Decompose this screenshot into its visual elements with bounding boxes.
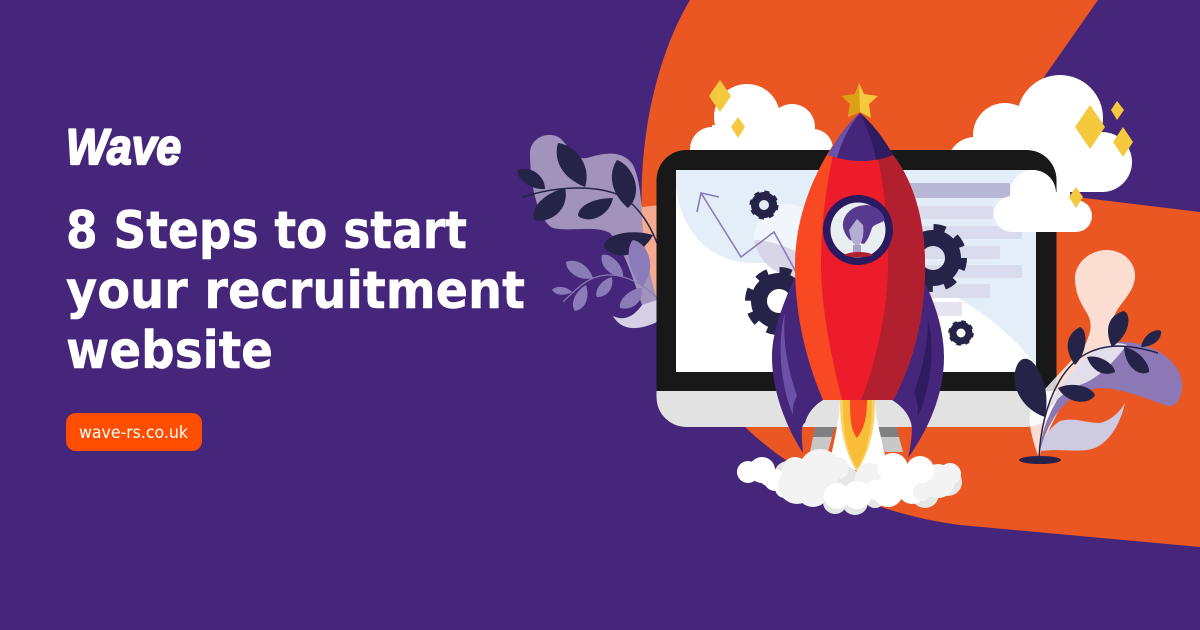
left plant behind monitor [517, 135, 660, 328]
monitor stand [810, 427, 903, 452]
rocket flames [828, 400, 888, 472]
heading [66, 201, 525, 381]
monitor [656, 150, 1056, 427]
line chart arrow [697, 193, 796, 272]
gear: top small [752, 192, 776, 218]
left fin [772, 277, 823, 453]
orange wave background [642, 0, 1200, 547]
gear: bottom small [950, 322, 972, 344]
pale circle on screen [754, 204, 820, 280]
gear: large left [748, 270, 810, 332]
rocket body [795, 113, 925, 400]
right fin [892, 283, 944, 458]
website button [66, 413, 202, 451]
cloud: front right [994, 170, 1092, 232]
cloud: top right [947, 75, 1132, 193]
rocket window with pilot [823, 195, 893, 265]
gear: large right [902, 228, 964, 288]
rocket nose [828, 113, 893, 161]
website button: wave-rs.co.uk [79, 423, 188, 443]
star on rocket [842, 83, 878, 118]
heading: 8 Steps to start [66, 201, 467, 261]
launch smoke [737, 449, 962, 515]
right plant [1014, 250, 1182, 464]
yellow sparkles [709, 80, 1133, 208]
heading: your recruitment [66, 261, 525, 321]
content bars on screen [900, 183, 1022, 316]
cloud: top left [690, 84, 833, 171]
rocket [772, 113, 944, 472]
logo: Wave: Wave [66, 119, 181, 175]
heading: website [66, 321, 273, 381]
